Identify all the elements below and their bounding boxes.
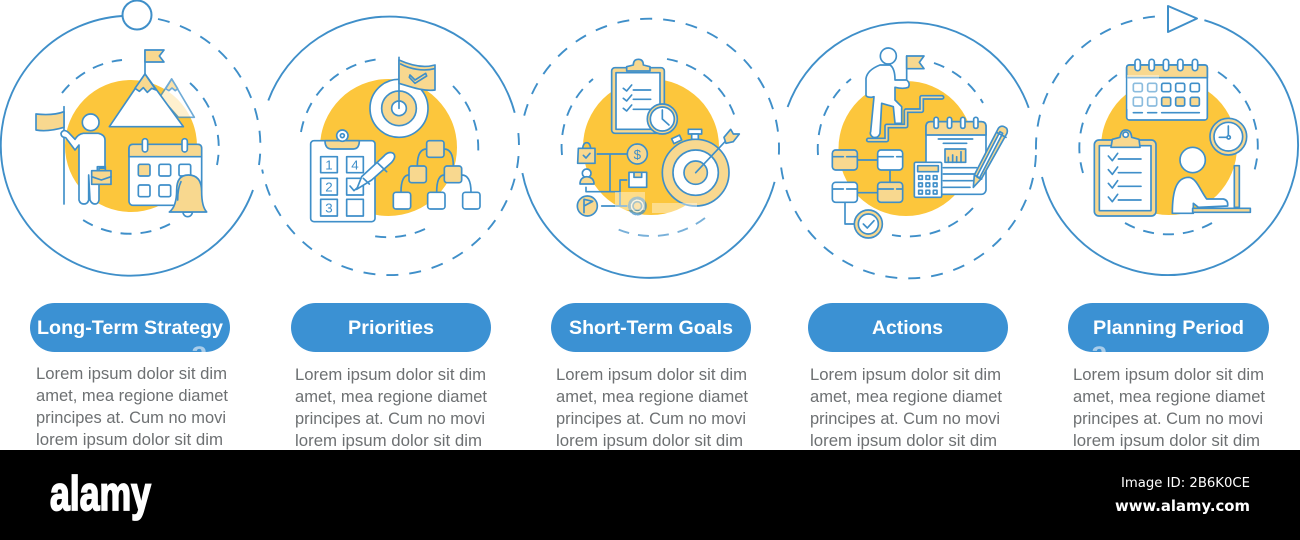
icon: process diagram	[577, 143, 647, 216]
text block: Actions description	[810, 366, 1002, 450]
inner dashed ring	[1079, 72, 1258, 234]
heading pill: Long-Term Strategy	[30, 303, 230, 352]
icon: stopwatch target	[662, 129, 729, 206]
text block: Long-Term Strategy description: principes at. Cum no movi	[36, 409, 226, 427]
yellow disc	[320, 79, 457, 216]
outer ring	[1036, 17, 1298, 275]
yellow disc	[65, 80, 197, 212]
text block: Long-Term Strategy description: lorem ipsum dolor sit dim	[36, 431, 223, 449]
inner dashed ring	[562, 59, 735, 236]
inner dashed ring	[62, 60, 219, 234]
outer ring	[780, 22, 1036, 278]
heading pill: Long-Term Strategy: a	[191, 336, 208, 369]
icon: bell	[169, 175, 207, 217]
icon: check flag	[399, 57, 435, 108]
heading pill: Short-Term Goals: Short-Term Goals	[569, 317, 733, 339]
icon: gear	[629, 198, 645, 214]
icon: back mountain	[160, 79, 194, 117]
image id: Image ID: 2B6K0CE	[1121, 475, 1250, 491]
icon: numbered clipboard: 4	[351, 158, 359, 173]
yellow disc	[838, 81, 974, 216]
text block: Long-Term Strategy description: amet, mea regione diamet	[36, 387, 228, 405]
text block: Priorities description	[295, 366, 487, 450]
icon: goal setting person, mountain and calendar	[36, 50, 207, 217]
icon: climbing person, flowchart and calendar report	[832, 48, 1007, 238]
text block: Actions description: lorem ipsum dolor sit dim	[810, 432, 997, 450]
icon: process diagram: $	[634, 147, 642, 162]
heading pill: Planning Period: a	[1091, 336, 1108, 369]
icon: clipboard checklist	[612, 59, 664, 133]
icon: target, clipboard and hierarchy	[311, 57, 480, 222]
heading pill: Long-Term Strategy: Long-Term Strategy	[37, 317, 223, 339]
text block: Planning Period description: Lorem ipsum dolor sit dim	[1073, 366, 1264, 384]
icon: person at laptop	[1172, 147, 1250, 213]
text block: Long-Term Strategy description: Lorem ipsum dolor sit dim	[36, 365, 227, 383]
alamy logo: alamy	[50, 468, 151, 521]
icon: target	[370, 79, 428, 137]
icon: flowchart	[832, 150, 903, 224]
text block: Actions description: amet, mea regione diamet	[810, 388, 1002, 406]
icon: clock	[647, 104, 677, 134]
icon: checklist, stopwatch target and process diagram	[577, 59, 739, 216]
heading pill: Priorities: Priorities	[348, 317, 434, 339]
panel: actions graphic	[780, 22, 1036, 278]
icon: stairs	[868, 97, 942, 140]
panel: long-term strategy graphic	[1, 0, 260, 276]
icon: hierarchy chart	[393, 141, 480, 209]
icon: clipboard checklist	[1094, 130, 1156, 216]
heading pill: Priorities	[291, 303, 491, 352]
text block: Priorities description: principes at. Cum no movi	[295, 410, 485, 428]
icon: numbered clipboard: 3	[325, 201, 333, 216]
icon: numbered clipboard: 1	[325, 158, 333, 173]
text block: Short-Term Goals description: lorem ipsum dolor sit dim	[556, 432, 743, 450]
text block: Planning Period description: lorem ipsum dolor sit dim	[1073, 432, 1260, 450]
text block: Planning Period description	[1073, 366, 1265, 450]
yellow disc	[1101, 79, 1237, 215]
icon: calendar, clipboard, clock and person at laptop	[1094, 59, 1250, 216]
website: www.alamy.com	[1115, 497, 1250, 515]
text block: Actions description: Lorem ipsum dolor sit dim	[810, 366, 1001, 384]
heading pill: Actions: Actions	[872, 317, 943, 339]
yellow disc	[583, 79, 719, 215]
icon: numbered clipboard: 2	[325, 180, 333, 195]
icon: calendar	[129, 139, 202, 205]
text block: Planning Period description: amet, mea regione diamet	[1073, 388, 1265, 406]
text block: Short-Term Goals description: amet, mea regione diamet	[556, 388, 748, 406]
icon: person with briefcase	[61, 114, 111, 204]
inner dashed ring	[301, 59, 478, 237]
icon: numbered clipboard	[311, 130, 375, 222]
heading pill: Actions	[808, 303, 1008, 352]
icon: flag	[907, 56, 924, 80]
outer ring	[1, 16, 260, 276]
icon: calculator	[914, 162, 942, 197]
text block: Priorities description: amet, mea regione diamet	[295, 388, 487, 406]
icon: flag	[36, 107, 64, 204]
outer ring	[522, 19, 779, 278]
heading pill: Short-Term Goals	[551, 303, 751, 352]
icon: calendar report	[926, 117, 986, 194]
panel: planning period graphic	[1036, 6, 1298, 275]
footer bar	[0, 450, 1300, 540]
text block: Short-Term Goals description: principes at. Cum no movi	[556, 410, 746, 428]
watermark wash over icons	[615, 75, 1159, 213]
text block: Priorities description: lorem ipsum dolor sit dim	[295, 432, 482, 450]
icon: pen	[357, 153, 395, 189]
text block: Long-Term Strategy description	[36, 365, 228, 449]
icon: clock	[1210, 118, 1247, 155]
end marker triangle	[1168, 6, 1197, 32]
icon: arrow	[696, 129, 739, 173]
text block: Priorities description: Lorem ipsum dolor sit dim	[295, 366, 486, 384]
icon: calendar	[1127, 59, 1207, 120]
heading pill: Planning Period	[1068, 303, 1269, 352]
icon: climbing person	[866, 48, 909, 137]
text block: Planning Period description: principes at. Cum no movi	[1073, 410, 1263, 428]
icon: mountain with flag	[109, 50, 183, 127]
text block: Actions description: principes at. Cum no movi	[810, 410, 1000, 428]
outer ring	[262, 17, 519, 275]
icon: pencil	[973, 126, 1007, 187]
panel: short-term goals graphic	[522, 19, 779, 278]
inner dashed ring	[818, 63, 983, 236]
icon: check badge	[854, 210, 882, 238]
text block: Short-Term Goals description	[556, 366, 748, 450]
text block: Short-Term Goals description: Lorem ipsum dolor sit dim	[556, 366, 747, 384]
heading pill: Planning Period: Planning Period	[1093, 317, 1244, 339]
start marker circle	[122, 0, 152, 30]
panel: priorities graphic	[262, 17, 519, 275]
